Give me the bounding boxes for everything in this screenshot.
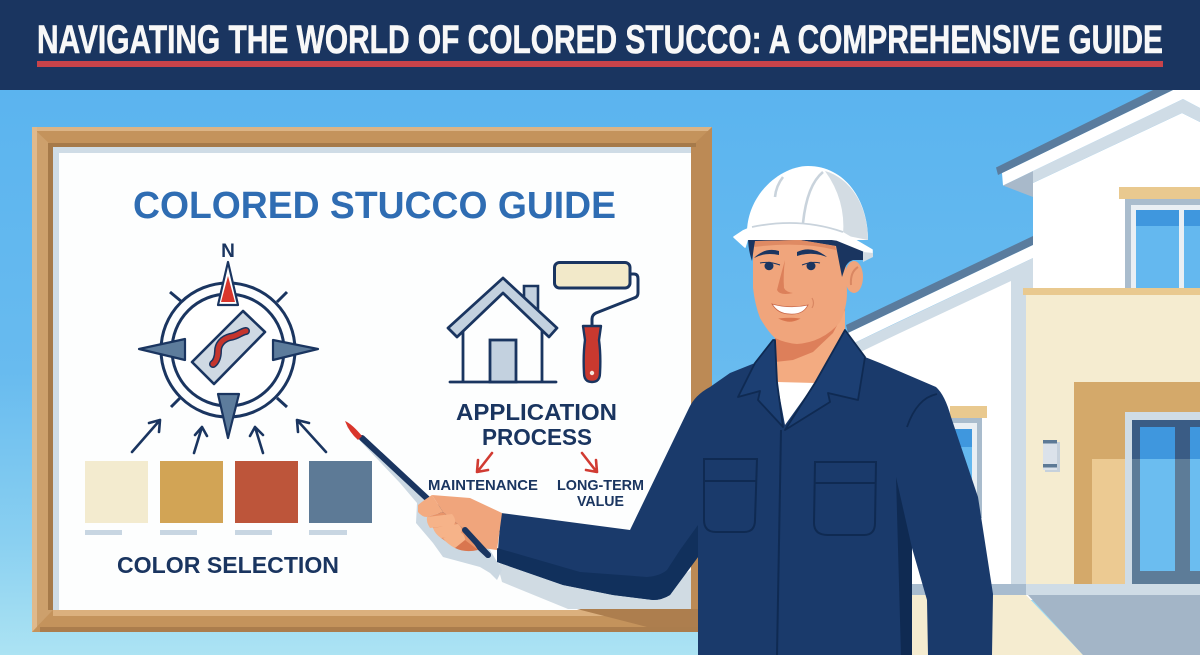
illustration: construction worker [345, 166, 993, 655]
label: long-term value [557, 477, 644, 510]
header banner [0, 0, 1200, 90]
south needle [218, 394, 239, 438]
icon: paint roller [554, 262, 638, 382]
eyes [760, 262, 820, 270]
label: long-term value: LONG-TERM [557, 477, 644, 494]
shoulder seam [907, 394, 937, 427]
wall lamp [1043, 440, 1060, 472]
small window behind the worker [940, 406, 987, 518]
pointer and hand shadow on board [346, 426, 502, 580]
left collar [738, 340, 783, 427]
board surface [53, 147, 691, 610]
jacket [497, 330, 993, 655]
hard hat [734, 166, 873, 262]
sleeve underside shade [497, 525, 698, 600]
compass north letter: N [221, 241, 235, 262]
plinth and ground [900, 584, 1200, 655]
undershirt [777, 382, 815, 425]
button placket seam [777, 430, 781, 655]
trowel [192, 311, 265, 384]
illustration: house [846, 90, 1200, 655]
forehead shadow [754, 240, 836, 250]
smile [772, 298, 814, 321]
cream entry block [1023, 288, 1200, 584]
colour swatches [85, 461, 372, 535]
shadow cast on frame [577, 609, 698, 627]
upper storey wall [1033, 113, 1200, 290]
label: application process: APPLICATION [456, 399, 617, 425]
upper window [1119, 187, 1200, 288]
ear [845, 261, 863, 293]
pointer stick [345, 421, 488, 555]
neck shadow [775, 290, 845, 362]
icon: compass with trowel [139, 241, 318, 438]
hair [748, 236, 864, 277]
right collar [785, 330, 865, 430]
icon: house [448, 278, 557, 382]
title underline [37, 61, 1163, 67]
red arrows to outcomes [477, 453, 597, 472]
label: long-term value: VALUE [577, 493, 624, 510]
west needle [139, 339, 185, 360]
face [753, 240, 847, 344]
label: maintenance: MAINTENANCE [428, 477, 538, 494]
label: application process [456, 399, 617, 450]
label: application process: PROCESS [482, 424, 592, 450]
display board [32, 127, 712, 632]
right pocket [814, 462, 876, 535]
eyebrows [754, 249, 827, 258]
glazed entry door [1125, 412, 1200, 584]
left pocket [704, 459, 757, 532]
north needle [218, 262, 238, 305]
east needle [273, 340, 318, 360]
arrows from swatches to compass [132, 420, 326, 453]
neck [775, 295, 845, 383]
label: color selection: COLOR SELECTION [117, 552, 339, 578]
nose [777, 260, 793, 294]
shadow cast by arm [497, 563, 691, 609]
pointing hand [418, 495, 502, 555]
board heading: COLORED STUCCO GUIDE [133, 185, 616, 227]
torso side shade [896, 477, 912, 655]
wooden frame [32, 127, 712, 632]
